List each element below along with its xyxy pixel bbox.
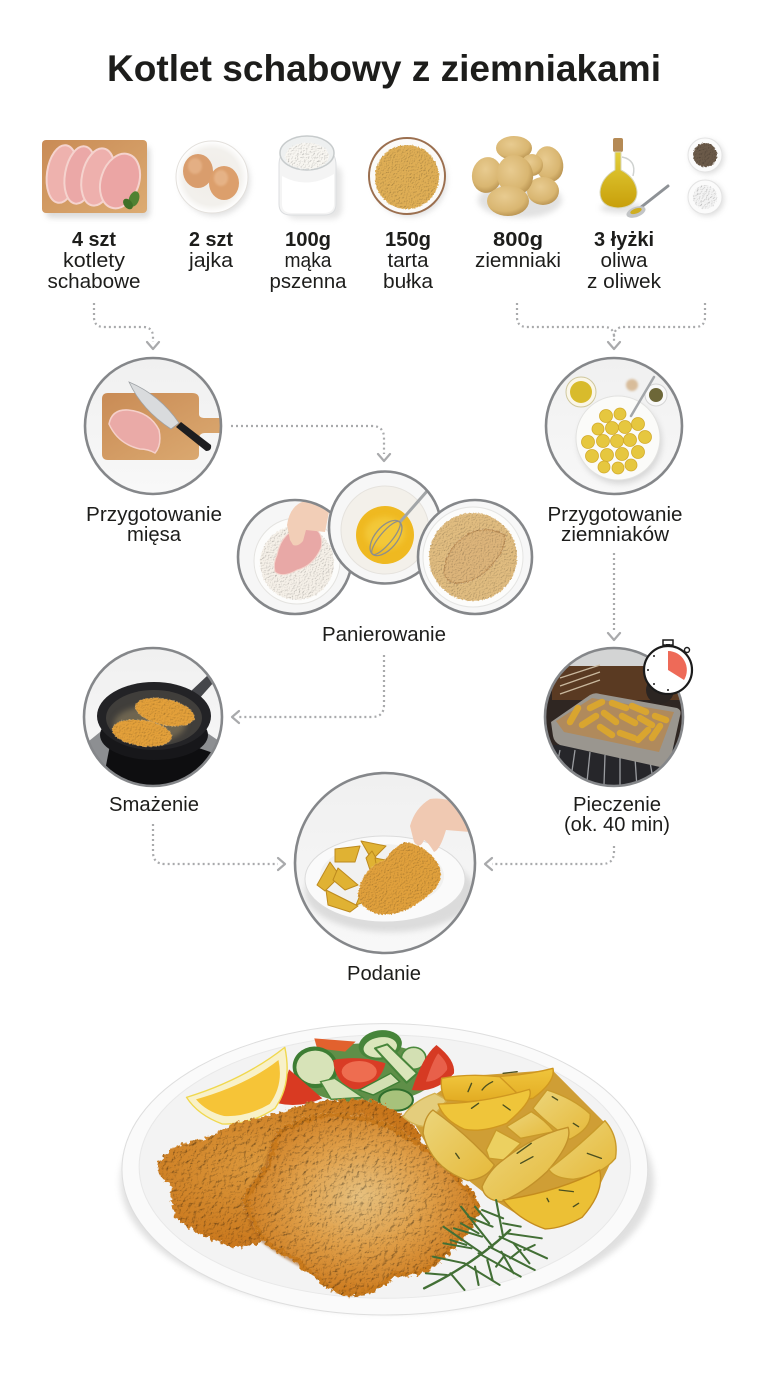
ingredient: flour jar xyxy=(279,136,342,219)
ingredient: breadcrumbs bowl xyxy=(369,138,447,217)
step: frying xyxy=(84,648,225,790)
icon: stopwatch xyxy=(644,640,692,694)
ingredient labels: schabowe xyxy=(48,271,140,293)
front cutlet xyxy=(245,1115,477,1295)
step labels lower: Smażenie xyxy=(109,794,199,816)
arrow: meat preparation to breading xyxy=(231,426,390,461)
ingredient labels: bułka xyxy=(383,271,434,293)
ingredient labels: pszenna xyxy=(270,271,347,293)
step labels upper: ziemniaków xyxy=(561,524,670,546)
ingredient labels: z oliwek xyxy=(587,271,662,293)
label: breading: Panierowanie xyxy=(322,624,446,646)
ingredient: potatoes xyxy=(469,136,567,218)
ingredient labels: ziemniaki xyxy=(475,250,561,272)
arrow: baking to serving xyxy=(485,846,614,870)
lemon wedge xyxy=(187,1047,287,1124)
step: baking in oven xyxy=(545,648,683,790)
step: meat preparation xyxy=(85,358,222,494)
potato wedges xyxy=(403,1068,616,1229)
ingredient: olive oil and spoon xyxy=(600,138,668,220)
arrow: potato preparation to baking xyxy=(608,553,620,640)
ingredient labels: 4 szt xyxy=(72,229,116,251)
title: Kotlet schabowy z ziemniakami xyxy=(107,48,661,89)
step labels lower xyxy=(109,794,670,836)
egg bowl with whisk xyxy=(329,472,441,584)
step labels lower: (ok. 40 min) xyxy=(564,814,670,836)
ingredient labels: kotlety xyxy=(63,250,125,272)
ingredient labels: 3 łyżki xyxy=(594,229,654,251)
step labels lower: Pieczenie xyxy=(573,794,661,816)
finished dish on plate xyxy=(121,1024,654,1315)
step: breading trio xyxy=(238,472,532,614)
step labels upper xyxy=(86,504,682,546)
ingredient: pepper and salt bowls xyxy=(688,138,724,216)
dill sprig xyxy=(424,1200,547,1290)
label: serving: Podanie xyxy=(347,963,421,985)
arrow: frying to serving xyxy=(153,824,285,870)
ingredient labels: 2 szt xyxy=(189,229,233,251)
ingredient labels: tarta xyxy=(388,250,429,272)
ingredient: pork cutlets on board xyxy=(42,140,150,218)
ingredient labels: oliwa xyxy=(600,250,648,272)
ingredient labels: 800g xyxy=(493,229,543,251)
flour bowl with hand xyxy=(238,500,352,614)
ingredient labels xyxy=(48,229,662,293)
back cutlet xyxy=(157,1099,426,1247)
step labels upper: Przygotowanie xyxy=(548,504,682,526)
plate xyxy=(121,1024,654,1315)
ingredient: eggs in bowl xyxy=(176,141,250,216)
arrow: cutlets to meat preparation xyxy=(94,303,159,349)
salad xyxy=(278,1027,454,1111)
breadcrumb bowl with cutlet xyxy=(418,500,532,614)
front cutlet shadow xyxy=(242,1132,356,1267)
ingredient labels: jajka xyxy=(188,250,234,272)
ingredient labels: mąka xyxy=(284,250,332,272)
step: serving xyxy=(295,773,475,953)
step labels upper: mięsa xyxy=(127,524,182,546)
step labels upper: Przygotowanie xyxy=(86,504,222,526)
arrow: breading to frying xyxy=(232,655,384,723)
ingredient labels: 150g xyxy=(385,229,431,251)
arrow: potatoes and oil to potato preparation xyxy=(517,303,705,349)
step: potato preparation xyxy=(546,358,682,494)
ingredient labels: 100g xyxy=(285,229,331,251)
